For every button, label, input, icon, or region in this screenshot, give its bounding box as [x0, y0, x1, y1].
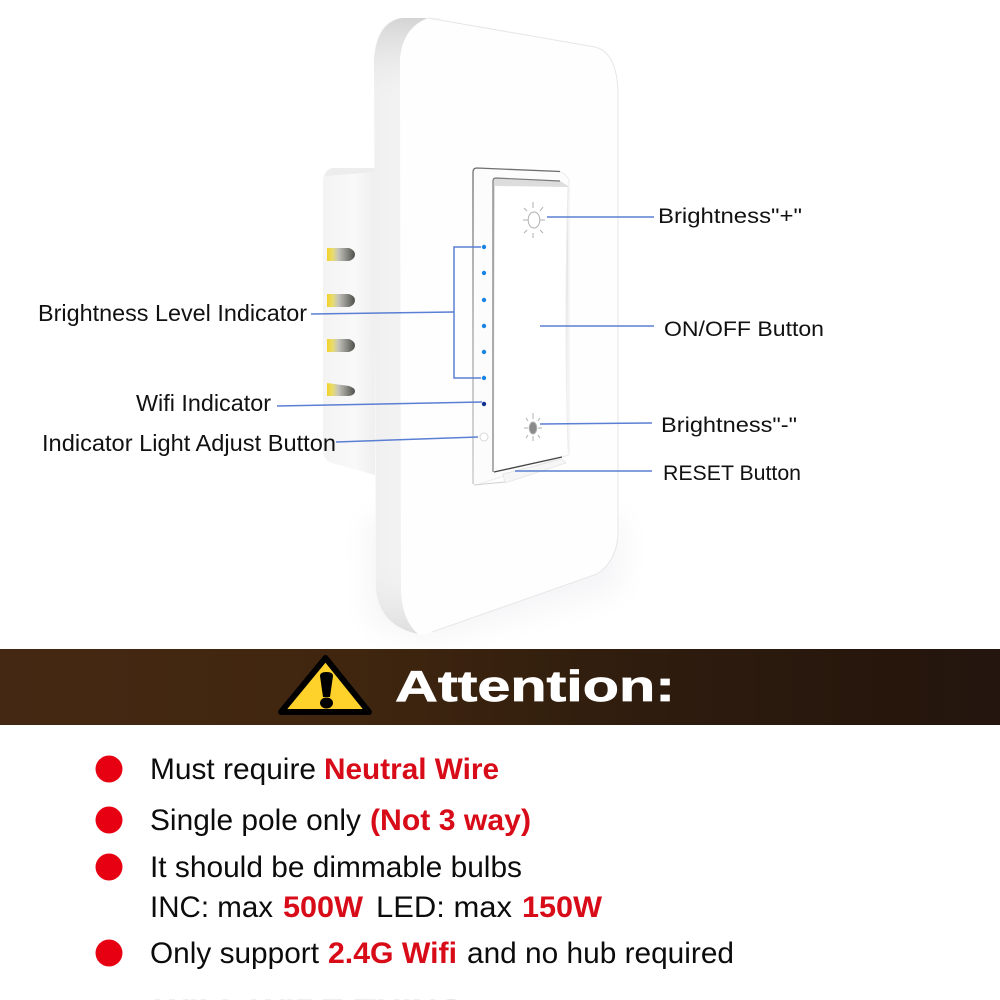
floor shadow: [365, 520, 625, 640]
label: RESET: RESET Button: [663, 462, 801, 485]
bullet 2: (Not 3 way): [370, 804, 531, 837]
bullet list: [96, 753, 734, 970]
switch product illustration: [323, 18, 625, 640]
bullet 3: [96, 851, 602, 924]
adjust button: [480, 433, 488, 441]
label: Brightness -: Brightness"-": [661, 414, 797, 437]
bullet 3: It should be dimmable bulbs: [150, 851, 522, 884]
bullet 3: 150W: [522, 891, 602, 924]
bullet 1: Must require: [150, 753, 316, 786]
bullet 4: Only support: [150, 937, 319, 970]
indicator LEDs: [482, 245, 486, 406]
icon: dim sun: [524, 413, 542, 441]
label: level indicator: Brightness Level Indicator: [38, 300, 307, 326]
bullet 3: INC: max: [150, 891, 273, 924]
icon: sun outline: [523, 202, 545, 238]
bullet 4: 2.4G Wifi: [328, 937, 457, 970]
bullet 4: and no hub required: [467, 937, 734, 970]
bullet 1: [96, 753, 499, 786]
label: wifi indicator: Wifi Indicator: [136, 390, 271, 416]
bullet 3: LED: max: [376, 891, 512, 924]
label: Brightness +: Brightness"+": [658, 205, 802, 228]
bullet 1: Neutral Wire: [324, 753, 499, 786]
rocker button: [493, 178, 568, 472]
bullet 2: Single pole only: [150, 804, 361, 837]
attention banner: [0, 649, 1000, 725]
leader lines: [277, 217, 654, 471]
reset button: [503, 459, 566, 483]
wall plate: [374, 18, 618, 634]
banner heading: Attention:: [395, 662, 675, 711]
bullet 2: [96, 804, 531, 837]
bullet 3: 500W: [283, 891, 363, 924]
label: ON/OFF: ON/OFF Button: [664, 318, 824, 341]
label: light adjust button: Indicator Light Adjust Button: [42, 430, 336, 456]
bullet 4: [96, 937, 734, 970]
switch frame: [473, 168, 569, 485]
back box with terminals: [323, 168, 375, 475]
icon: warning triangle: [281, 658, 369, 712]
